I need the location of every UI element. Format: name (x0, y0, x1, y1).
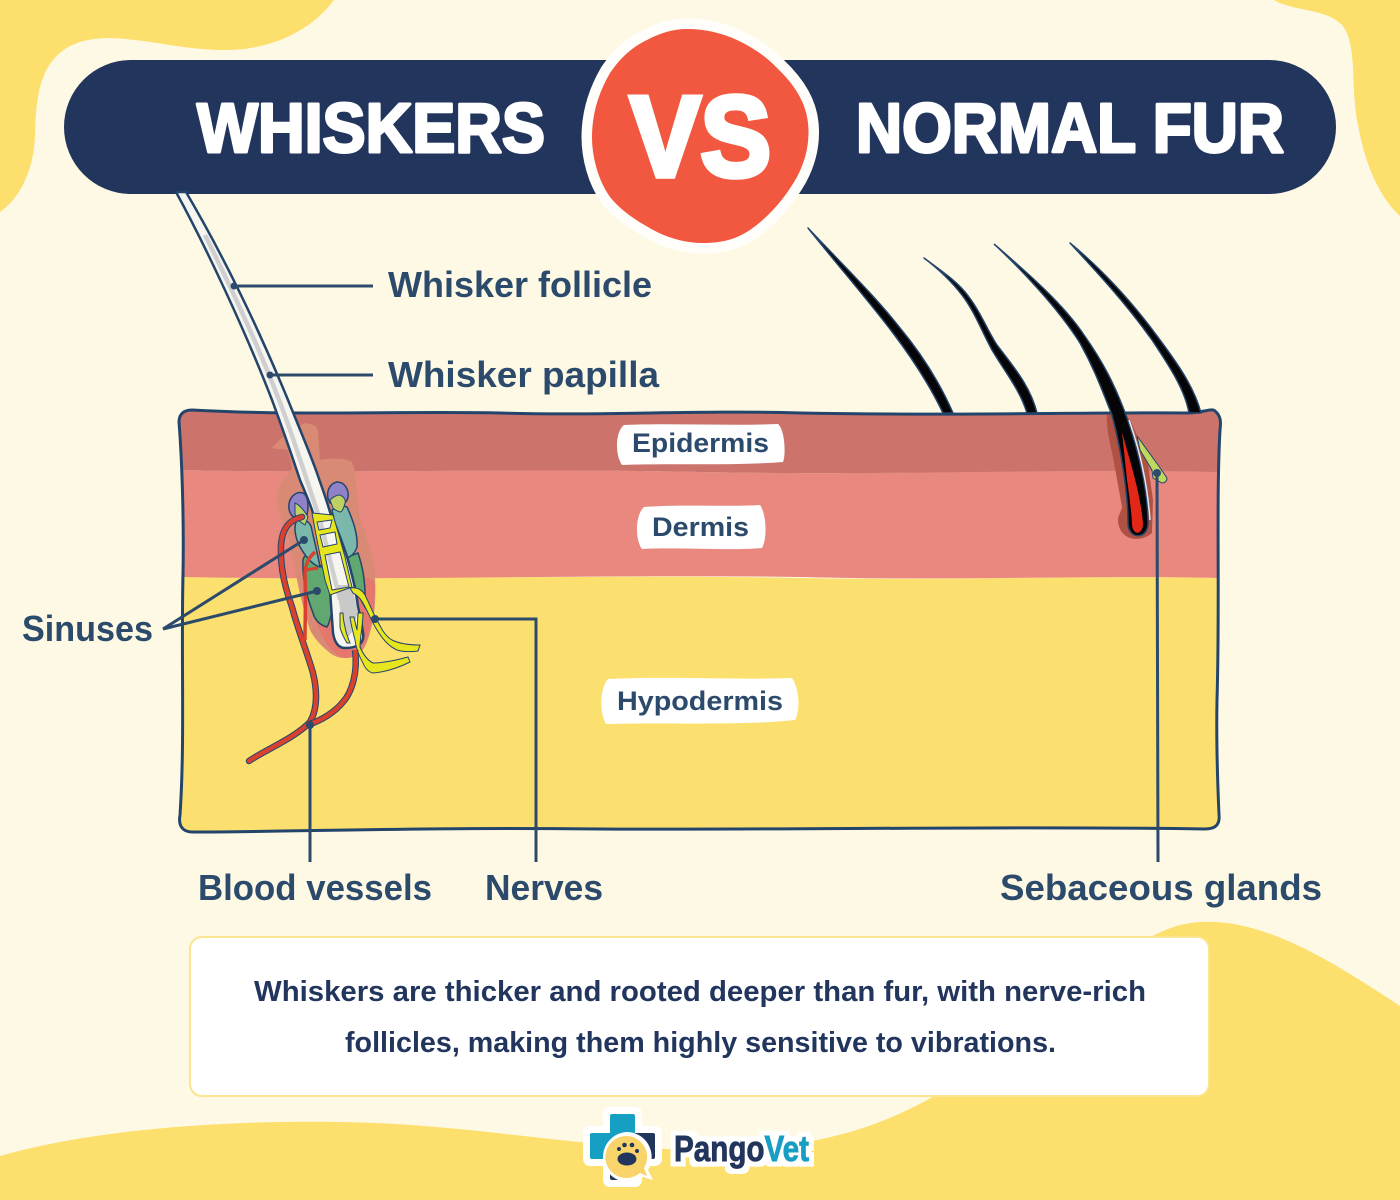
teal sinus right (332, 506, 357, 558)
hair highlight (1129, 420, 1150, 520)
dark green sinus right (347, 553, 365, 607)
hair 3 (994, 244, 1148, 536)
nerve branch two (350, 613, 410, 673)
teal sinus left (295, 520, 320, 567)
dark green sinus left (303, 556, 334, 627)
logo icon: cross with paw (590, 1114, 655, 1182)
purple sinus caps (289, 493, 308, 519)
VS badge: VS (630, 74, 771, 201)
red blood vessels (249, 517, 316, 761)
yellow nerve frame (312, 513, 352, 595)
label: blood vessels: Blood vessels (198, 867, 432, 908)
normal fur hairs (808, 228, 1201, 413)
layer: epidermis (179, 410, 1220, 473)
hair 1 (808, 228, 953, 413)
layer: dermis (182, 470, 1218, 578)
label: hypodermis (601, 678, 798, 724)
heading: normal fur: NORMAL FUR (856, 89, 1284, 167)
hair 4 (1070, 243, 1201, 413)
layer: hypodermis (180, 575, 1218, 832)
summary panel (190, 937, 1209, 1096)
hair 2 (924, 258, 1037, 413)
whisker follicle anatomy (176, 192, 420, 761)
title banner (64, 60, 1336, 194)
VS badge (592, 29, 809, 243)
background blob: top right (1274, 0, 1400, 216)
label: dermis: Dermis (652, 512, 749, 542)
label: epidermis (617, 424, 785, 465)
summary text: Whiskers are thicker and rooted deeper than fur, with nerve-rich (254, 976, 1146, 1008)
summary panel: follicles, making them highly sensitive to vibrations. (345, 1027, 1056, 1059)
label: whisker follicle: Whisker follicle (388, 264, 652, 305)
leader lines (163, 284, 1160, 862)
hair follicle with sebaceous gland (994, 244, 1167, 539)
background blob: bottom (0, 922, 1400, 1200)
hair root (1122, 432, 1143, 533)
label: dermis (637, 505, 766, 549)
follicle halo (272, 423, 375, 658)
whisker core (205, 235, 340, 600)
skin diagram (179, 410, 1220, 832)
label: whisker papilla: Whisker papilla (388, 354, 660, 395)
label: sebaceous glands: Sebaceous glands (1000, 867, 1322, 908)
follicle base glow (308, 578, 375, 658)
nerve branch one (350, 588, 420, 652)
whisker shaft (176, 192, 363, 648)
background blob: top left (0, 0, 334, 212)
follicle shadow (1107, 414, 1153, 539)
sebaceous gland (1137, 436, 1167, 483)
label: hypodermis: Hypodermis (617, 686, 783, 716)
logo wordmark: PangoVet (674, 1128, 809, 1169)
PangoVet logo (590, 1114, 809, 1182)
label: sinuses: Sinuses (22, 608, 153, 649)
nerve branch three (340, 613, 350, 643)
label: epidermis: Epidermis (632, 428, 769, 458)
heading: whiskers: WHISKERS (197, 89, 545, 167)
label: nerves: Nerves (485, 867, 603, 908)
skin outline (179, 410, 1220, 832)
light green glands (295, 503, 308, 525)
